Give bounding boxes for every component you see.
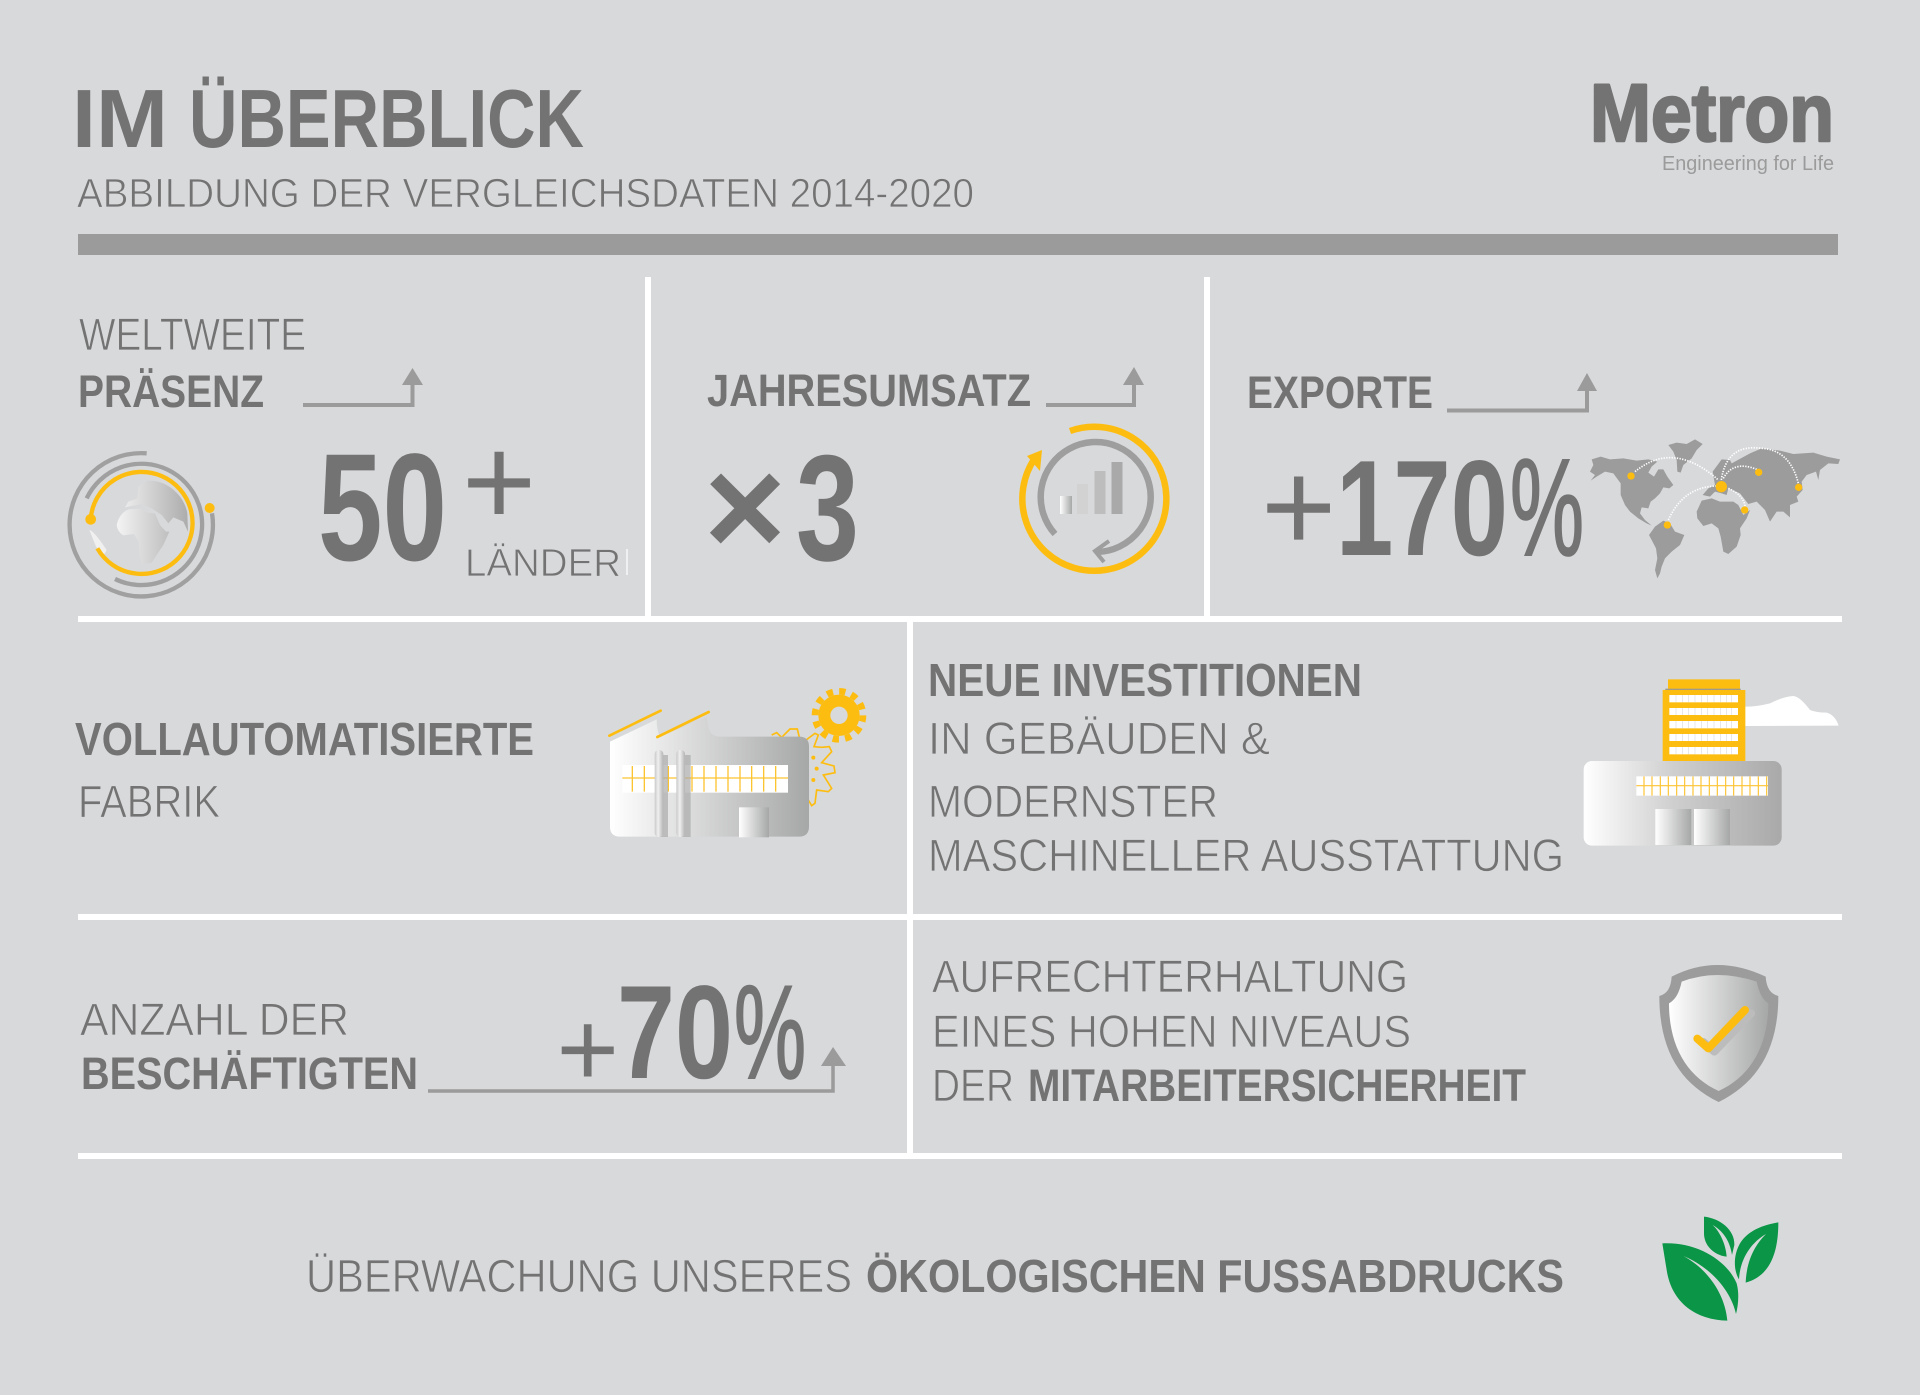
text block: IN GEBÄUDEN & <box>928 713 1270 764</box>
number: 50+: 50 <box>318 422 447 593</box>
title: ÜBERBLICK <box>189 72 584 165</box>
title <box>72 72 584 165</box>
number: 50+: + <box>462 410 536 552</box>
panel: weltweite praesenz <box>70 309 621 596</box>
heading: ANZAHL DER <box>80 994 349 1045</box>
logo: Metron: Metron <box>1590 68 1834 159</box>
logo: Metron: Engineering for Life <box>1662 153 1834 175</box>
number: +170%: 170 <box>1336 432 1508 584</box>
panel: jahresumsatz <box>704 365 1166 592</box>
number: +170%: % <box>1510 431 1584 585</box>
header bar <box>78 234 1838 255</box>
text block: AUFRECHTERHALTUNG <box>932 951 1408 1002</box>
text block: MASCHINELLER AUSSTATTUNG <box>928 830 1564 881</box>
heading: FABRIK <box>78 776 220 827</box>
text block: ÖKOLOGISCHEN FUSSABDRUCKS <box>866 1250 1564 1302</box>
number: +70%: + <box>556 989 619 1109</box>
text block: MITARBEITERSICHERHEIT <box>1028 1060 1526 1111</box>
number: x3: 3 <box>796 423 859 592</box>
heading: EXPORTE <box>1247 367 1433 418</box>
text block <box>306 1250 1564 1302</box>
heading: WELTWEITE <box>79 309 306 360</box>
icon: building <box>1584 679 1839 846</box>
panel: anzahl der beschaeftigten <box>80 959 846 1109</box>
text block: DER <box>932 1060 1014 1111</box>
title: IM <box>72 72 168 165</box>
icon: revenue cycle <box>1022 427 1166 571</box>
number: x3 <box>704 423 859 592</box>
text block <box>928 654 1564 881</box>
text block: ÜBERWACHUNG UNSERES <box>306 1250 852 1302</box>
icon: globe <box>70 453 215 596</box>
text block <box>932 951 1526 1111</box>
arrow <box>303 368 423 405</box>
icon: shield <box>1659 965 1778 1102</box>
heading: JAHRESUMSATZ <box>707 365 1031 416</box>
icon: world map <box>1590 439 1840 578</box>
text block: NEUE INVESTITIONEN <box>928 654 1362 706</box>
number: +70%: 70 <box>617 959 733 1107</box>
number: +170% <box>1261 431 1584 585</box>
icon: factory <box>609 691 863 837</box>
panel: vollautomatisierte fabrik <box>75 691 863 837</box>
icon: leaves <box>1662 1217 1778 1321</box>
panel: mitarbeitersicherheit <box>932 951 1778 1111</box>
heading: PRÄSENZ <box>78 366 264 417</box>
heading <box>80 994 418 1099</box>
header <box>72 68 1834 216</box>
panel: neue investitionen <box>928 654 1839 881</box>
panel: oekologischer fussabdruck <box>306 1217 1778 1321</box>
number: +70% <box>556 959 806 1109</box>
heading <box>75 713 534 827</box>
text block: MODERNSTER <box>928 776 1218 827</box>
label: Laender: LÄNDER <box>465 542 621 585</box>
number: +170%: + <box>1261 435 1336 579</box>
text block: EINES HOHEN NIVEAUS <box>932 1006 1411 1057</box>
number: x3: × <box>704 428 786 585</box>
heading: VOLLAUTOMATISIERTE <box>75 713 534 765</box>
grid lines <box>78 277 1842 1159</box>
arrow <box>428 1047 846 1091</box>
number: +70%: % <box>734 959 806 1107</box>
arrow <box>1447 373 1597 410</box>
arrow <box>1046 367 1144 405</box>
heading: BESCHÄFTIGTEN <box>81 1048 418 1099</box>
subtitle: ABBILDUNG DER VERGLEICHSDATEN 2014-2020 <box>77 170 974 216</box>
heading <box>78 309 306 417</box>
panel: exporte <box>1247 367 1840 585</box>
